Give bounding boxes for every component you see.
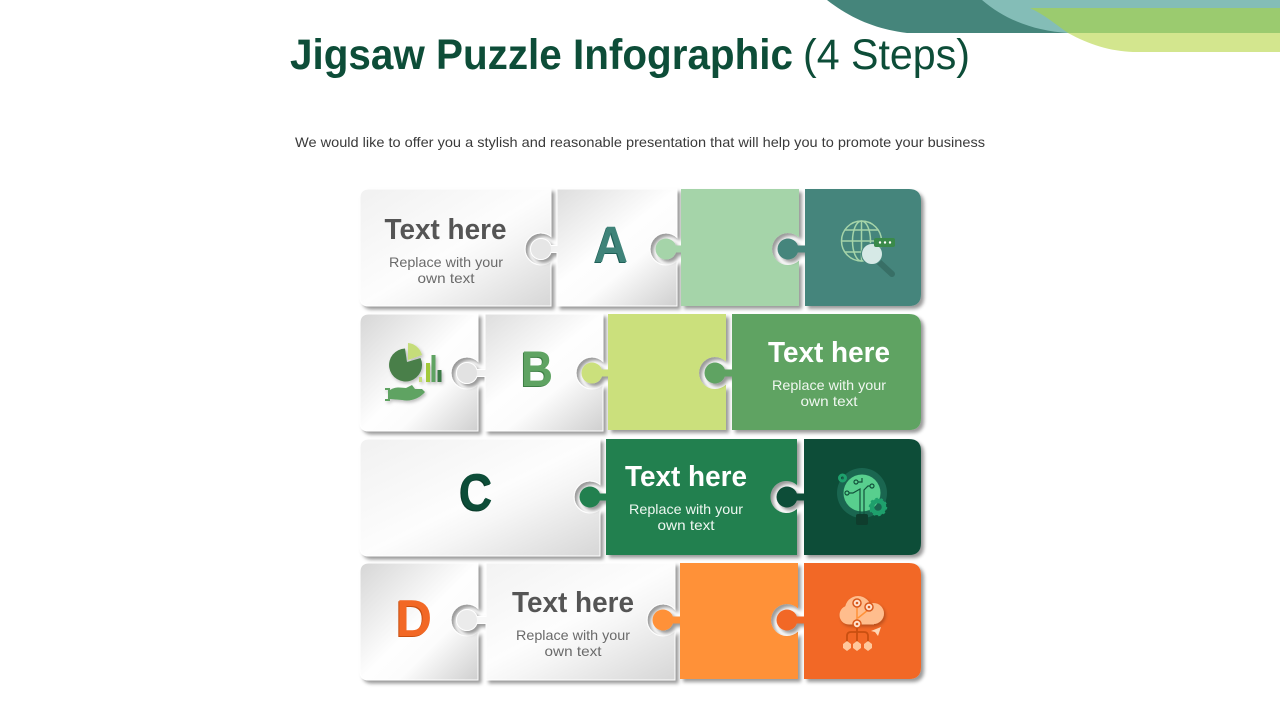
piece: letter A: A (593, 217, 627, 274)
piece: letter D: D (395, 591, 431, 649)
row 3: step C (360, 439, 921, 556)
piece: letter D: D (396, 590, 432, 648)
piece: chart icon (360, 314, 478, 431)
row 1: step A (360, 189, 921, 306)
piece: dark green text block: own text (658, 517, 715, 533)
piece: letter D (360, 563, 478, 680)
title: (4 Steps) (803, 31, 970, 79)
piece: letter C: C (460, 464, 492, 522)
piece: letter A: A (594, 216, 628, 273)
piece: deep green icon (777, 439, 921, 555)
icon: globe with magnifier (842, 221, 895, 274)
piece: letter B: B (521, 341, 553, 397)
title: Jigsaw Puzzle Infographic (290, 31, 793, 79)
piece: letter B: B (520, 342, 552, 398)
icon: pie chart on a hand (385, 343, 442, 401)
piece: dark green text block (580, 439, 797, 555)
piece: text block A: Replace with your (389, 254, 503, 270)
piece: letter C (360, 439, 600, 556)
piece: text block A: Text here (384, 214, 506, 246)
piece: light green blank (656, 189, 799, 306)
piece: letter A (531, 189, 677, 306)
row 2: step B (360, 314, 921, 431)
piece: letter C: C (458, 465, 492, 523)
row 4: step D (360, 563, 921, 680)
piece: text block D: Text here (512, 587, 634, 619)
icon: circuit light bulb with gears (837, 468, 887, 525)
piece: deep orange icon (777, 563, 921, 679)
piece: dark green text block: Text here (625, 461, 747, 493)
piece: green text block: Replace with your (772, 377, 886, 393)
piece: letter B (457, 314, 603, 431)
piece: orange blank (653, 563, 798, 679)
piece: green text block: Text here (768, 337, 890, 369)
piece: lime blank (582, 314, 726, 430)
decorative top-right waves (827, 0, 1280, 52)
piece: green text block: own text (800, 393, 858, 409)
piece: text block D (457, 563, 675, 680)
piece: text block D: own text (544, 643, 602, 659)
subtitle: We would like to offer you a stylish and reasonable presentation that will help you to promote your business (295, 134, 985, 150)
piece: teal icon (778, 189, 921, 306)
piece: green text block (705, 314, 921, 430)
piece: text block A (360, 189, 551, 306)
piece: dark green text block: Replace with your (629, 501, 743, 517)
piece: text block A: own text (418, 270, 475, 286)
piece: text block D: Replace with your (516, 627, 630, 643)
icon: cloud network (840, 596, 884, 651)
